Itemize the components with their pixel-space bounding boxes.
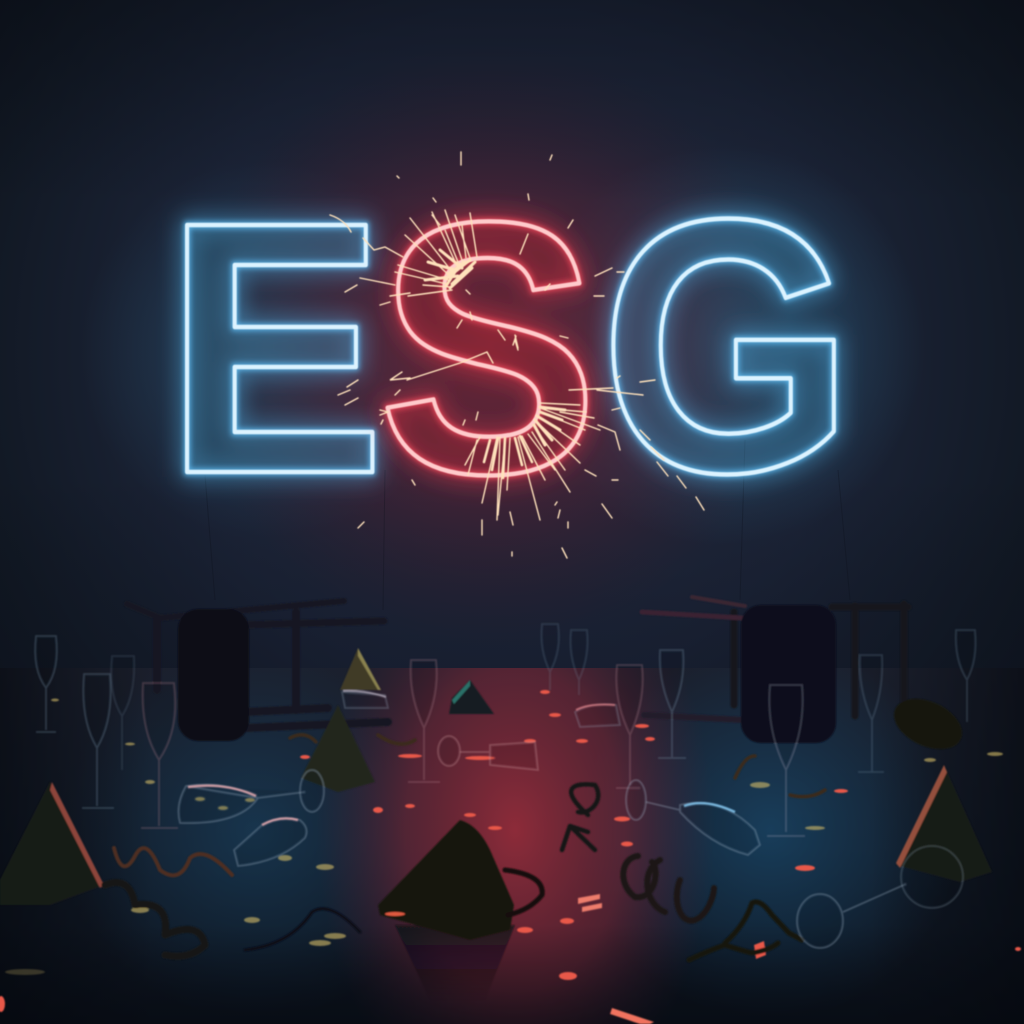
neon letter S: S [378,148,598,549]
neon sign: ESG [165,145,854,549]
neon letter S: S [378,148,598,549]
fallen glass: rear [575,704,620,727]
party hat: middle [301,705,375,792]
glass: front right [767,685,805,836]
fallen glasses [178,691,963,948]
lower burst [465,432,570,520]
party hat: far left [0,782,104,905]
streamer: left spiral [114,848,232,875]
confetti [0,690,1021,1024]
scattered sparks [338,152,704,558]
sparks from the S [330,152,704,558]
fallen glass: lower left [234,818,307,866]
fallen glass: centre right [626,780,760,855]
right burst [533,403,600,470]
fallen glass: by hat [342,691,388,708]
neon letter G: G [600,145,854,549]
chair: left [127,601,388,741]
glass: left [82,674,114,808]
neon letter S: S [378,148,598,549]
floor [0,668,1024,1024]
glass: right [858,655,884,772]
glass: far left [35,636,57,732]
streamer: under glasses [290,735,825,797]
glass: centre rear [541,624,588,695]
party hat: small red-lit [449,680,494,714]
streamer: thin centre [245,909,360,950]
neon letter E: E [165,148,385,549]
streamer: red zone curl [562,784,598,850]
glass: centre-right [616,665,643,788]
fallen glass: left [178,770,324,823]
neon letter E: E [165,148,385,549]
fallen glass: lower right [797,846,963,948]
glass: centre-left [408,660,440,782]
glass: left rear [111,656,134,770]
streamer: lower right [689,902,802,960]
streamer: centre hat tail [505,870,542,915]
neon letter G: G [600,145,854,549]
streamers [105,735,825,960]
glass: far right [956,630,976,722]
party hat: right edge [896,765,992,882]
standing glasses [35,624,976,836]
chair: right [642,597,908,743]
neon letter G: G [600,145,854,549]
upper-left spark burst [330,210,477,305]
floor objects [0,597,1021,1024]
neon letter E: E [165,148,385,549]
party hat: top centre-left [340,648,381,690]
wall background [0,0,1024,680]
streamer: right curls [623,856,714,921]
glass: left front [141,683,178,828]
party hat: fallen centre [378,820,515,1000]
party hat: fallen right [886,689,970,759]
fallen glass: red zone [438,736,538,770]
glass: right-centre [658,650,686,758]
